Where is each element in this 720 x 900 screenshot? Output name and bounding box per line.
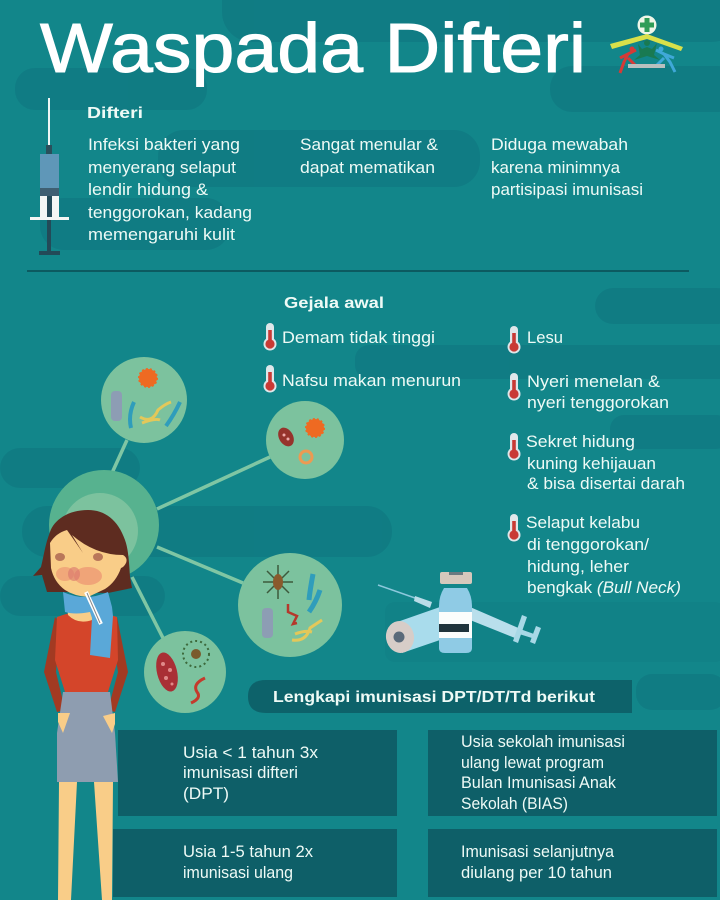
cheeks and nose [56, 567, 74, 581]
panel: school age: Usia sekolah imunisasi [461, 733, 625, 751]
head halo [49, 470, 159, 580]
text block: definition: menyerang selaput [88, 159, 236, 177]
bacteria circle: top [101, 357, 187, 443]
panel: under 1 year: (DPT) [183, 785, 229, 803]
symptoms list: right: Nyeri menelan & [527, 373, 660, 391]
thermometer [86, 592, 101, 624]
panel: every 10 years: Imunisasi selanjutnya [461, 843, 615, 861]
neck [67, 605, 93, 622]
panel: school age: ulang lewat program [461, 754, 604, 772]
woman figure [33, 470, 159, 900]
symptoms list: right: hidung, leher [527, 558, 630, 576]
hair [33, 510, 132, 593]
symptoms list: right [508, 326, 685, 597]
bacteria circle: bottom [144, 631, 226, 713]
bacteria circle: lower right [238, 553, 342, 657]
symptoms list: right: Sekret hidung [526, 433, 635, 451]
symptoms list: right: Lesu [527, 329, 563, 347]
text block: contagious: Sangat menular & [300, 136, 438, 154]
hands [58, 713, 115, 733]
text block: definition: tenggorokan, kadang [88, 204, 252, 222]
text block: definition: memengaruhi kulit [88, 226, 235, 244]
symptoms list: right: di tenggorokan/ [527, 536, 649, 554]
section banner: Lengkapi imunisasi DPT/DT/Td berikut [273, 689, 596, 706]
skirt [57, 692, 118, 782]
text block: outbreak [491, 136, 643, 199]
sleeves [44, 617, 128, 712]
text block: definition: lendir hidung & [88, 181, 208, 199]
icon: ministry logo [610, 16, 683, 73]
icon: syringe [30, 98, 69, 255]
symptoms list: right: nyeri tenggorokan [527, 394, 669, 412]
section banner [248, 680, 632, 713]
panel: every 10 years: diulang per 10 tahun [461, 864, 612, 882]
text block: definition [88, 136, 252, 244]
text block: definition: Infeksi bakteri yang [88, 136, 240, 154]
symptoms list: left: Demam tidak tinggi [282, 329, 435, 347]
title: Waspada Difteri [40, 9, 586, 87]
panel: 1-5 years [113, 829, 397, 897]
heading: Difteri: Difteri [87, 105, 143, 122]
torso [55, 612, 118, 692]
panel: school age: Bulan Imunisasi Anak [461, 774, 617, 792]
symptoms list: right: kuning kehijauan [527, 455, 656, 473]
panel: school age: Sekolah (BIAS) [461, 795, 568, 813]
background blobs [0, 0, 720, 710]
text block: outbreak: Diduga mewabah [491, 136, 628, 154]
symptoms list: right: bengkak (Bull Neck) [527, 579, 681, 597]
panel: 1-5 years: Usia 1-5 tahun 2x [183, 843, 314, 861]
face [50, 530, 127, 597]
vaccine vial and syringe [378, 572, 541, 655]
panel: school age [428, 730, 717, 816]
legs [58, 782, 113, 900]
panel: under 1 year [118, 730, 397, 816]
panel: 1-5 years: imunisasi ulang [183, 864, 293, 882]
text block: contagious [300, 136, 438, 177]
panel: under 1 year: imunisasi difteri [183, 764, 298, 782]
bacteria circle: right [266, 401, 344, 479]
panel: every 10 years [428, 829, 717, 897]
text block: outbreak: partisipasi imunisasi [491, 181, 643, 199]
symptoms list: right: Selaput kelabu [526, 514, 640, 532]
text block: contagious: dapat mematikan [300, 159, 435, 177]
text block: outbreak: karena minimnya [491, 159, 621, 177]
connector lines [112, 440, 270, 638]
symptoms list: right: & bisa disertai darah [527, 475, 685, 493]
scarf [63, 592, 113, 658]
panel: under 1 year: Usia < 1 tahun 3x [183, 744, 319, 762]
symptoms list: left [264, 323, 461, 392]
symptoms list: left: Nafsu makan menurun [282, 372, 461, 390]
heading: Gejala awal: Gejala awal [284, 295, 384, 312]
